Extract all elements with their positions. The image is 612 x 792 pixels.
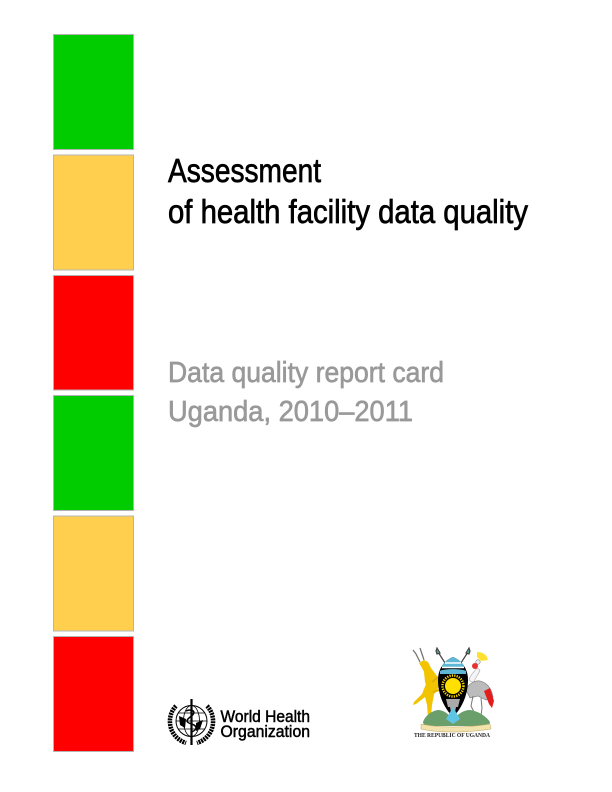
logo: World Health Organization: [170, 699, 310, 745]
logo: coat of arms of Uganda: [413, 648, 494, 739]
text: World Health Organization: Organization: [220, 722, 310, 741]
bar: green 2: [54, 396, 134, 510]
text: The Republic of Uganda: THE REPUBLIC OF UGANDA: [414, 733, 491, 739]
title: of health facility data quality: [168, 193, 528, 230]
icon: spears: [436, 648, 470, 666]
subtitle: [168, 357, 444, 428]
bar: amber 2: [54, 516, 134, 631]
bar: amber 1: [54, 155, 134, 270]
icon: crane: [466, 652, 494, 716]
icon: WHO emblem: [170, 699, 213, 745]
title: [168, 152, 528, 230]
icon: shield: [438, 657, 468, 717]
icon: kob: [413, 648, 440, 718]
bar: red 2: [54, 636, 134, 752]
text: World Health Organization: World Health: [220, 707, 310, 726]
subtitle: Data quality report card: [168, 357, 444, 389]
panel: colour bars: [54, 34, 134, 752]
bar: green 1: [54, 34, 134, 150]
subtitle: Uganda, 2010–2011: [168, 396, 413, 428]
bar: red 1: [54, 276, 134, 390]
text: World Health Organization: [220, 707, 310, 741]
icon: mound and ribbon: [421, 707, 491, 732]
title: Assessment: [168, 152, 321, 189]
